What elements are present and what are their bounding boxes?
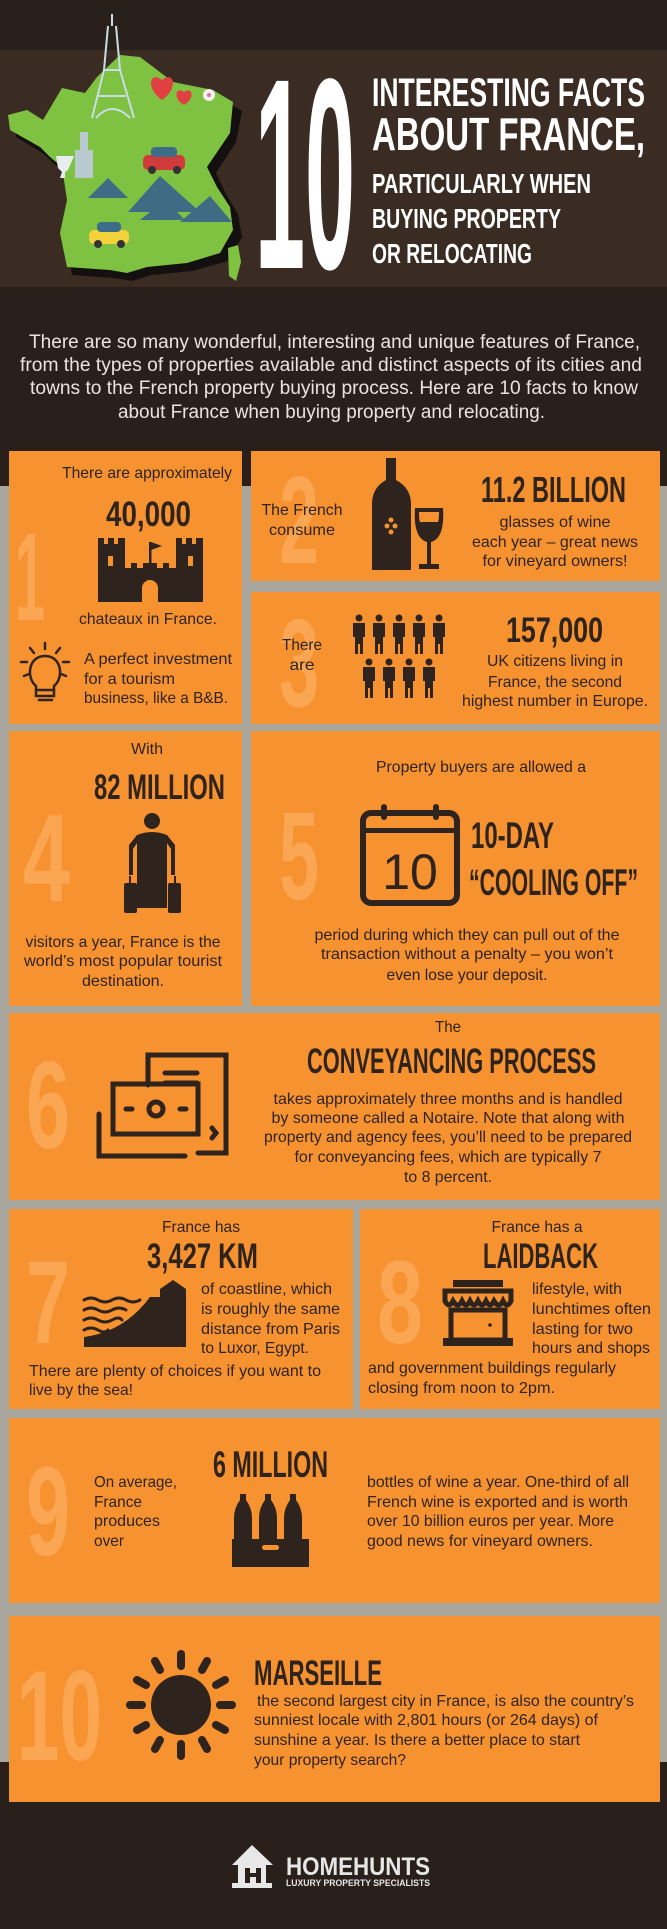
intro text: from the types of properties available and distinct aspects of its cities and	[20, 355, 642, 376]
panel 7: coastline: 3,427 KM	[147, 1237, 258, 1276]
icon: eiffel tower	[92, 14, 134, 118]
panel 7: coastline: to Luxor, Egypt.	[201, 1340, 309, 1357]
panel 1: chateaux: 1	[15, 509, 45, 647]
intro text: There are so many wonderful, interesting and unique features of France,	[29, 332, 640, 353]
panel 7: coastline: There are plenty of choices if you want to	[29, 1363, 321, 1380]
panel 8: laidback lifestyle: LAIDBACK	[483, 1237, 598, 1276]
panel 8: laidback lifestyle: lifestyle, with	[532, 1281, 622, 1298]
panel 6: conveyancing	[9, 1013, 660, 1200]
panel 5: cooling off: 10-DAY	[471, 815, 554, 856]
panel 4: tourists: With	[131, 741, 163, 758]
icon: mountains	[88, 176, 232, 222]
icon: red car	[143, 147, 185, 174]
panel 3: UK citizens: 157,000	[506, 611, 603, 650]
panel 6: conveyancing: property and agency fees, you’ll need to be prepared	[264, 1129, 632, 1146]
panel 7: coastline: distance from Paris	[201, 1321, 340, 1338]
panel 3: UK citizens: UK citizens living in	[487, 653, 623, 670]
panel 4: tourists	[9, 731, 242, 1006]
icon: calendar: 10	[382, 844, 438, 900]
text: 10	[255, 22, 355, 326]
icon: calendar	[363, 804, 457, 903]
icon: castle	[98, 538, 203, 602]
panel 9: wine production: 6 MILLION	[213, 1444, 328, 1485]
panel 6: conveyancing: by someone called a Notaire. Note that along with	[272, 1110, 624, 1127]
icon: wine bottle and glass	[372, 458, 443, 570]
footer logo: HOMEHUNTS	[286, 1853, 430, 1881]
panel 10: Marseille: sunshine a year. Is there a better place to start	[254, 1732, 581, 1749]
icon: yellow car	[89, 222, 129, 248]
panel 9: wine production	[9, 1418, 660, 1603]
panel 3: UK citizens: are	[290, 657, 315, 674]
panel 5: cooling off: 5	[279, 788, 319, 926]
panel 10: Marseille: sunniest locale with 2,801 hours (or 264 days) of	[254, 1712, 599, 1729]
footer logo	[232, 1845, 430, 1888]
panel 3: UK citizens: France, the second	[488, 674, 622, 691]
panel 4: tourists: world’s most popular tourist	[23, 953, 223, 970]
panel 3: UK citizens	[251, 592, 660, 733]
icon: shop	[443, 1280, 513, 1346]
panel 1: chateaux: There are approximately	[62, 465, 232, 482]
panel 10: Marseille	[9, 1616, 660, 1802]
panel 5: cooling off: even lose your deposit.	[386, 967, 548, 984]
panel 8: laidback lifestyle: closing from noon to 2pm.	[368, 1380, 555, 1397]
footer logo: LUXURY PROPERTY SPECIALISTS	[286, 1878, 430, 1888]
panel 7: coastline: 7	[26, 1237, 70, 1369]
panel 8: laidback lifestyle: hours and shops	[532, 1340, 650, 1357]
panel 7: coastline: is roughly the same	[201, 1301, 340, 1318]
panel 6: conveyancing: to 8 percent.	[404, 1169, 492, 1186]
panel 7: coastline	[9, 1209, 353, 1409]
panel 2: wine consumption: The French	[262, 502, 342, 519]
panel 1: chateaux: chateaux in France.	[79, 611, 217, 628]
panel 8: laidback lifestyle	[360, 1209, 660, 1409]
panel 7: coastline: France has	[162, 1219, 240, 1236]
panel 10: Marseille: 10	[17, 1645, 102, 1788]
panel 4: tourists: visitors a year, France is the	[26, 934, 221, 951]
icon: light bulb	[21, 643, 69, 700]
title: OR RELOCATING	[372, 238, 532, 269]
panel 2: wine consumption: 2	[279, 452, 319, 590]
panel 1: chateaux: for a tourism	[84, 671, 175, 688]
panel 8: laidback lifestyle: 8	[377, 1237, 423, 1369]
panel 9: wine production: over	[94, 1533, 125, 1550]
intro text	[20, 332, 642, 423]
panel 8: laidback lifestyle: and government buildings regularly	[368, 1360, 616, 1377]
panel 8: laidback lifestyle: lasting for two	[532, 1321, 633, 1338]
panel 9: wine production: produces	[94, 1513, 160, 1530]
panel 9: wine production: French wine is exported and is worth	[367, 1494, 628, 1511]
panel 9: wine production: over 10 billion euros per year. More	[367, 1513, 614, 1530]
icon: wine crate	[232, 1494, 309, 1567]
panel 1: chateaux: A perfect investment	[84, 651, 233, 668]
panel 10: Marseille: MARSEILLE	[254, 1654, 382, 1693]
panel 7: coastline: live by the sea!	[29, 1382, 133, 1399]
panel 3: UK citizens: 3	[279, 595, 319, 733]
panel 8: laidback lifestyle: lunchtimes often	[532, 1301, 651, 1318]
panel 1: chateaux: business, like a B&B.	[84, 690, 228, 707]
panel 9: wine production: bottles of wine a year. One-third of all	[367, 1474, 629, 1491]
title: BUYING PROPERTY	[372, 203, 561, 234]
panel 10: Marseille: the second largest city in France, is also the country’s	[257, 1693, 634, 1710]
panel 6: conveyancing: for conveyancing fees, which are typically 7	[294, 1149, 602, 1166]
panel 1: chateaux	[9, 451, 242, 724]
panel 5: cooling off	[251, 731, 660, 1006]
panel 9: wine production: 9	[26, 1441, 70, 1582]
icon: hearts	[151, 77, 192, 105]
panel 4: tourists: 82 MILLION	[94, 768, 225, 807]
panel 6: conveyancing: 6	[26, 1037, 70, 1175]
panel 5: cooling off: Property buyers are allowed a	[376, 759, 586, 776]
panel 2: wine consumption: for vineyard owners!	[482, 553, 628, 570]
icon: people	[353, 614, 445, 698]
icon: money document	[99, 1055, 226, 1156]
panel 5: cooling off: transaction without a penalty – you won’t	[321, 946, 614, 963]
intro text: about France when buying property and relocating.	[118, 402, 545, 423]
panel 3: UK citizens: There	[282, 637, 322, 654]
panel 6: conveyancing: The	[435, 1019, 461, 1036]
panel 4: tourists: 4	[23, 790, 70, 928]
panel 6: conveyancing: takes approximately three months and is handled	[274, 1091, 622, 1108]
icon: bottle and glass	[56, 132, 93, 178]
panel 1: chateaux: 40,000	[106, 495, 191, 534]
icon: sun	[130, 1654, 232, 1756]
panel 4: tourists: destination.	[82, 973, 164, 990]
panel 3: UK citizens: highest number in Europe.	[462, 693, 648, 710]
panel 2: wine consumption: consume	[269, 522, 335, 539]
panel 7: coastline: of coastline, which	[201, 1281, 332, 1298]
panel 9: wine production: France	[94, 1494, 142, 1511]
icon: traveller with suitcases	[124, 813, 181, 913]
panel 9: wine production: On average,	[94, 1474, 177, 1491]
panel 2: wine consumption: glasses of wine	[500, 514, 611, 531]
panel 2: wine consumption	[251, 451, 660, 590]
icon: coast with lighthouse	[84, 1280, 186, 1347]
map of France	[8, 14, 242, 281]
panel 2: wine consumption: each year – great news	[472, 534, 638, 551]
panel 8: laidback lifestyle: France has a	[492, 1219, 583, 1236]
panel 10: Marseille: your property search?	[254, 1752, 406, 1769]
title	[372, 71, 645, 269]
panel 5: cooling off: period during which they can pull out of the	[314, 927, 620, 944]
panel 9: wine production: good news for vineyard owners.	[367, 1533, 593, 1550]
intro text: towns to the French property buying process. Here are 10 facts to know	[30, 378, 638, 399]
